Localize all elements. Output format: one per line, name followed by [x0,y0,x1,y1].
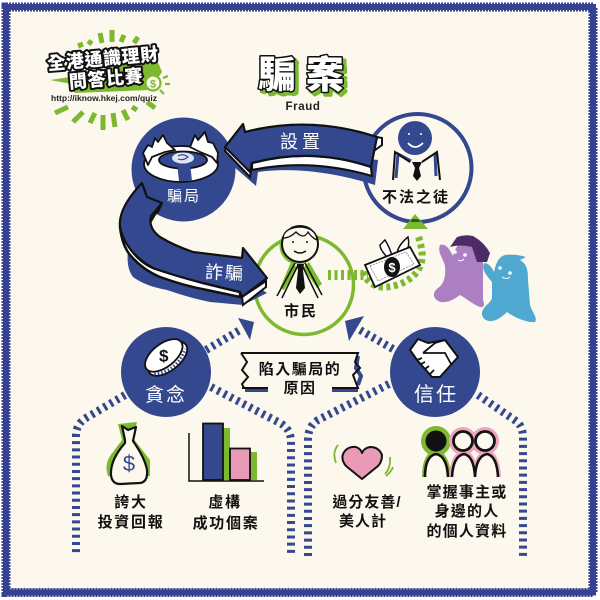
badge url: http://iknow.hkej.com/quiz [51,93,157,103]
callout: reasons for falling into scam [241,353,361,397]
caption: knows personal data [426,483,508,540]
caption: exaggerated returns: 投資回報 [98,513,164,531]
chart: fake success cases [189,424,264,481]
title: 騙 [258,55,296,97]
badge: quiz competition: $ [150,78,156,90]
badge heading [47,43,160,92]
caption: fabricated success: 成功個案 [193,514,259,532]
dashed branch: trust right [478,395,523,556]
callout: reasons for falling into scam: 原因 [283,380,317,397]
node: trust circle: 信任 [414,383,458,406]
caption: knows personal data: 身邊的人 [435,502,499,520]
badge heading: 問答比賽 [68,65,144,92]
node: trust circle [390,327,480,417]
connector: trust to citizen [345,316,393,349]
node: greed circle [121,327,211,417]
badge: quiz competition [47,30,170,130]
arrow: defraud: 詐騙 [205,262,245,284]
icon: flying banknote: $ [388,260,396,275]
badge heading: 全港通識理財 [47,43,160,74]
dashed branch: trust left [308,384,389,558]
title [258,55,347,113]
node: citizen circle: 市民 [284,302,318,320]
title: 騙 [261,58,299,100]
icon: bear trap [143,132,218,182]
icon: blue character [482,255,536,322]
node: scam trap circle: 騙局 [167,188,201,205]
dashed branch: greed left [76,395,125,555]
subtitle: Fraud [286,101,320,113]
title: 案 [309,58,347,100]
caption: overly friendly: 美人計 [339,512,387,530]
icon: flying banknote [365,237,420,287]
dashed branch: greed right [211,387,291,557]
caption: fabricated success: 虛構 [208,493,242,511]
caption: fabricated success [193,493,259,532]
arrow: set up [225,124,382,186]
icon: citizen [277,226,322,298]
icon: money bag: $ [123,451,135,476]
icon: coin: $ [159,346,169,365]
icon: smiling fraudster [393,121,440,181]
callout: reasons for falling into scam: 陷入騙局的 [259,360,341,378]
node: fraudster circle: 不法之徒 [382,188,450,206]
icon: money bag [106,422,150,484]
icon: purple character [434,235,490,307]
caption: knows personal data: 的個人資料 [426,522,508,540]
caption: overly friendly [332,493,402,530]
icon: people with personal data [421,426,499,477]
node: citizen circle [254,226,354,334]
arrow: set up: 設置 [280,132,324,152]
caption: knows personal data: 掌握事主或 [426,483,508,501]
icon: heart [334,445,393,479]
connector: greed to citizen [206,318,254,350]
caption: exaggerated returns: 誇大 [114,493,148,511]
node: scam trap circle [132,118,236,222]
arrow: defraud [120,183,267,305]
node: fraudster circle [364,114,472,222]
node: greed circle: 貪念 [145,383,187,406]
title: 案 [306,55,344,97]
icon: dollar sun [146,70,170,94]
icon: handshake [410,339,458,377]
arrow: green money flow [328,214,428,287]
caption: exaggerated returns [98,493,164,531]
caption: overly friendly: 過分友善/ [332,493,402,511]
